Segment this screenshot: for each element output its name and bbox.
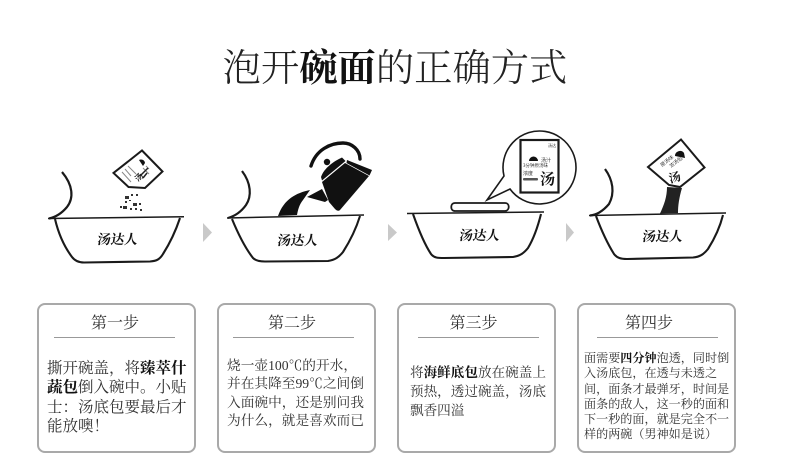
packet resting on lid [451, 203, 509, 211]
text: step 1 [47, 360, 187, 435]
text: step 2: 入面碗中，还是别问我 [227, 395, 364, 410]
callout bubble with packet: 汤 [540, 168, 555, 189]
arrow 2 [388, 224, 397, 241]
text: step 4: 下一秒的面，就是完全不一 [584, 412, 729, 426]
text: step 4: 间，面条才最弹牙，时间是 [584, 382, 729, 396]
packet step 4 [648, 140, 704, 187]
heading: step 3: 第三步 [449, 315, 498, 332]
callout bubble with packet: 3分钟原汤味 [523, 162, 548, 169]
text: step 1: 能放噢！ [47, 418, 109, 435]
text: step 4 [584, 351, 729, 441]
text: step 2: 烧一壶100℃的开水， [227, 358, 357, 373]
panel: step 1 [37, 303, 196, 453]
bowl step 2 [227, 171, 364, 262]
callout bubble with packet [487, 131, 576, 204]
text: step 2: 并在其降至99℃之间倒 [227, 376, 364, 391]
arrow 1 [203, 223, 212, 242]
bowl step 2: 汤达人 [276, 229, 320, 249]
heading: step 2: 第二步 [268, 315, 316, 332]
text: step 3: 预热，透过碗盖，汤底 [410, 384, 546, 399]
text: step 1: 士：汤底包要最后才 [47, 399, 187, 416]
heading: step 4: 第四步 [625, 315, 673, 332]
callout bubble with packet: 汤达 [548, 142, 556, 149]
text: step 2 [227, 358, 364, 428]
text: step 2: 为什么，就是喜欢而已 [227, 413, 364, 428]
callout bubble with packet: 浓度 [523, 170, 533, 177]
water stream [278, 190, 310, 216]
arrow 3 [566, 223, 574, 242]
text: step 4: 入汤底包，在透与未透之 [584, 366, 717, 380]
text: step 3: 飘香四溢 [410, 403, 464, 418]
text: step 3: 将海鲜底包放在碗盖上 [410, 365, 546, 380]
bowl step 4 [589, 169, 726, 259]
text: step 4: 面条的敌人，这一秒的面和 [584, 397, 729, 411]
packet step 4: 原汤味 [659, 154, 675, 169]
packet step 4: 浓汤包 [668, 155, 684, 170]
text: step 4: 面需要四分钟泡透，同时倒 [584, 351, 729, 365]
packet step 1: 汤 [132, 171, 146, 184]
kettle [307, 143, 372, 211]
bowl step 3: 汤达人 [458, 224, 502, 244]
panel: step 4 [577, 303, 736, 453]
callout bubble with packet: 汤汁 [541, 157, 551, 164]
packet step 1 [114, 150, 162, 188]
panel: step 3 [397, 303, 556, 453]
bowl step 3 [407, 212, 544, 258]
panel: step 2 [217, 303, 376, 453]
bowl step 1 [48, 172, 184, 262]
packet step 4: 汤 [667, 167, 683, 187]
soup stream [660, 187, 682, 214]
bowl step 1: 汤达人 [96, 228, 140, 248]
title: 泡开碗面的正确方式 [223, 48, 567, 90]
text: step 3 [410, 365, 546, 418]
text: step 1: 蔬包倒入碗中。小贴 [47, 379, 187, 396]
heading: step 1: 第一步 [91, 315, 139, 332]
seasoning particles [120, 194, 142, 211]
bowl step 4: 汤达人 [641, 225, 685, 245]
text: step 4: 样的两碗（男神如是说） [584, 427, 717, 441]
text: step 1: 撕开碗盖，将臻萃什 [47, 360, 187, 377]
